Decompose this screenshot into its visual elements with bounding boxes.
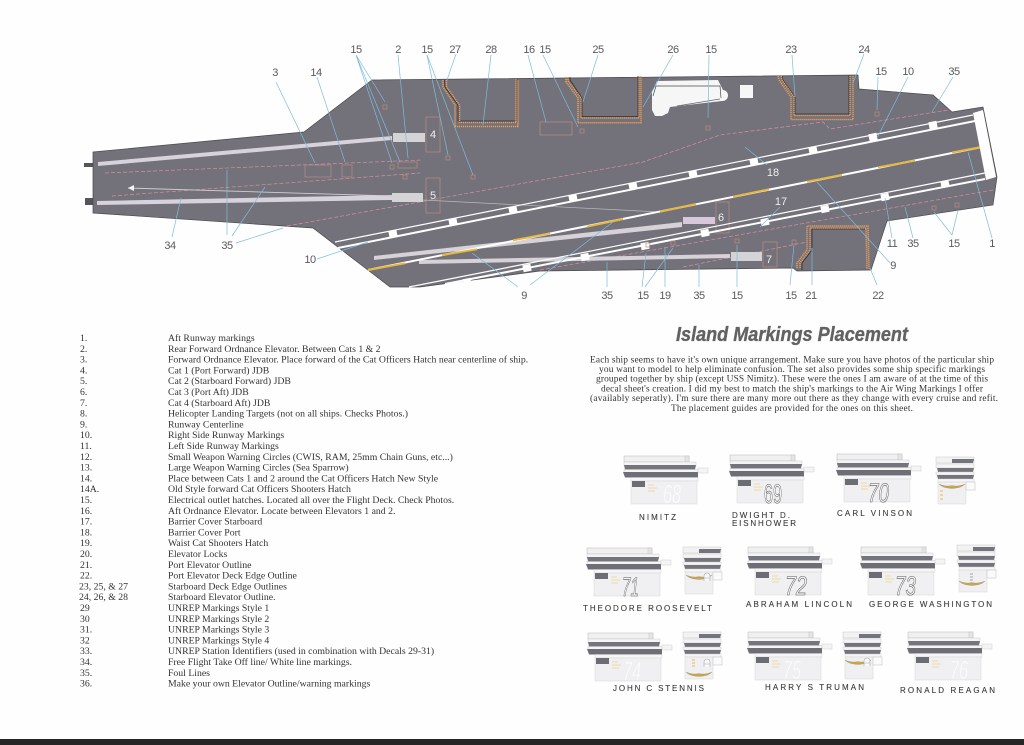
ship: Theodore Roosevelt: THEODORE ROOSEVELT	[583, 604, 712, 613]
ship: Harry S Truman: HARRY S TRUMAN	[765, 683, 864, 692]
elevator outline 27 and 28	[443, 79, 518, 126]
catapult 1 track and JDB 4	[98, 117, 440, 166]
numbered decal list: Forward Ordnance Elevator. Place forward of the Cat Officers Hatch near centerline of ship.	[168, 355, 528, 366]
ship: John C Stennis detail	[683, 632, 722, 679]
callout numbers: 10	[902, 66, 914, 78]
numbered decal list: 13.	[80, 463, 92, 474]
ship: George Washington	[860, 547, 992, 609]
numbered decal list: Cat 3 (Port Aft) JDB	[168, 387, 249, 398]
callout numbers: 17	[775, 196, 787, 208]
catapult 3 track and JDB 6: 6	[718, 212, 724, 224]
numbered decal list: 14.	[80, 473, 92, 484]
ship: Carl Vinson: CARL VINSON	[837, 509, 912, 518]
numbered decal list: Cat 4 (Starboard Aft) JDB	[168, 398, 271, 409]
numbered decal list: 33.	[80, 646, 92, 657]
numbered decal list: 10.	[80, 430, 92, 441]
numbered decal list: Helicopter Landing Targets (not on all ships. Checks Photos.)	[168, 409, 408, 420]
catapult 2 track and JDB 5: 5	[430, 190, 436, 202]
scanned bottom edge	[0, 739, 1024, 745]
numbered decal list: Small Weapon Warning Circles (CWIS, RAM, 25mm Chain Guns, etc...)	[168, 452, 453, 463]
numbered decal list: Place between Cats 1 and 2 around the Cat Officers Hatch New Style	[168, 473, 438, 484]
ship: Ronald Reagan	[900, 632, 995, 695]
ship: Ronald Reagan: RONALD REAGAN	[900, 686, 995, 695]
callout numbers: 2	[395, 44, 401, 56]
ship: Theodore Roosevelt	[583, 548, 712, 613]
ship: Harry S Truman detail	[843, 632, 882, 679]
ship: Theodore Roosevelt detail	[683, 547, 722, 594]
right side runway markings	[335, 115, 975, 248]
island	[652, 80, 728, 116]
island markings paragraph: decal sheet's creation. I did my best to match the ship's markings to the Air Wing Markings I offer	[601, 384, 984, 394]
callout numbers: 10	[304, 254, 316, 266]
numbered decal list: 35.	[80, 668, 92, 679]
callout numbers: 9	[521, 290, 527, 302]
carrier flight deck diagram	[84, 44, 997, 302]
ship: Dwight D. Eisenhower: 69	[764, 479, 782, 509]
numbered decal list: 20.	[80, 549, 92, 560]
numbered decal list: 22.	[80, 571, 92, 582]
ship: Ronald Reagan: 76	[950, 655, 968, 685]
ship: Dwight D. Eisenhower: EISNHOWER	[732, 519, 796, 528]
callout numbers: 35	[948, 66, 960, 78]
free flight arrow line	[128, 185, 660, 212]
numbered decal list: Starboard Deck Edge Outlines	[168, 581, 287, 592]
callout numbers: 11	[887, 238, 898, 250]
callout numbers	[164, 44, 995, 302]
numbered decal list: 12.	[80, 452, 92, 463]
ship: John C Stennis: 74	[623, 656, 641, 686]
island markings paragraph: The placement guides are provided for the ones on this sheet.	[671, 403, 913, 414]
catapult 3 track and JDB 6	[374, 202, 729, 260]
elevator outline 23 and 24	[778, 75, 853, 120]
numbered decal list: 2.	[80, 344, 87, 355]
ship: Nimitz: NIMITZ	[639, 513, 676, 522]
aft runway marking band	[973, 110, 996, 180]
ship: Harry S Truman: 75	[783, 655, 801, 685]
ship: Carl Vinson detail	[936, 457, 975, 504]
callout numbers: 9	[890, 260, 896, 272]
numbered decal list: Barrier Cover Starboard	[168, 517, 262, 528]
ship: Dwight D. Eisenhower: DWIGHT D.	[732, 511, 790, 520]
numbered decal list: UNREP Markings Style 1	[168, 603, 269, 614]
ship: Abraham Lincoln: 72	[785, 571, 807, 601]
callout numbers: 18	[767, 167, 779, 179]
callout numbers: 15	[875, 66, 887, 78]
numbered decal list: 16.	[80, 506, 92, 517]
ship: Dwight D. Eisenhower	[729, 455, 814, 528]
numbered decal list: 23, 25, & 27	[79, 581, 128, 592]
numbered decal list: 18.	[80, 527, 92, 538]
callout numbers: 24	[858, 44, 870, 56]
heading: Island Markings Placement: Island Markings Placement	[676, 324, 909, 346]
numbered decal list: Elevator Locks	[168, 549, 227, 560]
numbered decal list: Left Side Runway Markings	[168, 441, 279, 452]
catapult 4 track and JDB 7	[419, 242, 777, 267]
island deck square	[740, 85, 753, 98]
ship: George Washington: 73	[895, 571, 916, 601]
callout numbers: 15	[350, 44, 362, 56]
left side runway markings	[409, 173, 985, 287]
numbered decal list: UNREP Station Identifiers (used in combination with Decals 29-31)	[168, 646, 434, 657]
numbered decal list: Make your own Elevator Outline/warning markings	[168, 679, 370, 690]
ship: Theodore Roosevelt: 71	[622, 572, 639, 602]
numbered decal list: Starboard Elevator Outline.	[168, 592, 276, 603]
callout numbers: 25	[592, 44, 604, 56]
numbered decal list: 31.	[80, 625, 92, 636]
numbered decal list: Foul Lines	[168, 668, 210, 679]
numbered decal list: 8.	[80, 409, 87, 420]
island markings paragraph: you want to model to help eliminate confusion. The set also provides some ship specific markings	[599, 364, 985, 375]
numbered decal list: 6.	[80, 387, 87, 398]
ship: George Washington detail	[957, 545, 996, 592]
numbered decal list: Runway Centerline	[168, 419, 244, 430]
port elevator outline 21 and 22	[797, 226, 869, 270]
callout numbers: 35	[693, 290, 705, 302]
ship: John C Stennis	[587, 633, 704, 693]
callout numbers: 15	[421, 44, 433, 56]
numbered decal list: 4.	[80, 365, 87, 376]
catapult 2 track and JDB 5	[97, 178, 440, 213]
island markings paragraph	[590, 354, 998, 414]
numbered decal list: 1.	[80, 333, 87, 344]
callout numbers: 22	[872, 290, 884, 302]
callout numbers: 15	[637, 290, 649, 302]
island markings paragraph: (availably seperatly). I'm sure there are many more out there as they change with every cruise and refit.	[590, 393, 998, 404]
ship: Abraham Lincoln: ABRAHAM LINCOLN	[746, 600, 852, 609]
numbered decal list: 29	[80, 603, 90, 614]
numbered decal list: 15.	[80, 495, 92, 506]
numbered decal list: 9.	[80, 419, 87, 430]
numbered decal list: 7.	[80, 398, 87, 409]
callout numbers: 23	[785, 44, 797, 56]
numbered decal list	[79, 333, 528, 690]
catapult 4 track and JDB 7: 7	[766, 254, 772, 266]
numbered decal list: 32	[80, 635, 90, 646]
numbered decal list: Right Side Runway Markings	[168, 430, 284, 441]
numbered decal list: UNREP Markings Style 2	[168, 614, 269, 625]
numbered decal list: Old Style forward Cat Officers Shooters Hatch	[168, 484, 351, 495]
numbered decal list: Port Elevator Deck Edge Outline	[168, 571, 297, 582]
numbered decal list: Port Elevator Outline	[168, 560, 251, 571]
ship: Carl Vinson	[836, 454, 921, 518]
callout numbers: 15	[705, 44, 717, 56]
callout numbers: 34	[164, 240, 176, 252]
callout numbers: 19	[659, 290, 671, 302]
numbered decal list: Large Weapon Warning Circles (Sea Sparrow)	[168, 463, 349, 474]
numbered decal list: Aft Runway markings	[168, 333, 255, 344]
hatches and ordnance elevators	[305, 105, 959, 247]
numbered decal list: 14A.	[80, 484, 99, 495]
numbered decal list: 19.	[80, 538, 92, 549]
island markings paragraph: Each ship seems to have it's own unique arrangement. Make sure you have photos of the particular ship	[590, 354, 994, 366]
numbered decal list: Waist Cat Shooters Hatch	[168, 538, 268, 549]
callout numbers: 16	[523, 44, 535, 56]
callout numbers: 27	[449, 44, 461, 56]
numbered decal list: Rear Forward Ordnance Elevator. Between Cats 1 & 2	[168, 344, 381, 355]
numbered decal list: 3.	[80, 355, 87, 366]
numbered decal list: Cat 1 (Port Forward) JDB	[168, 365, 270, 376]
callout numbers: 14	[310, 67, 322, 79]
ship: Carl Vinson: 70	[868, 478, 889, 508]
foul lines	[105, 110, 993, 270]
callout numbers: 35	[907, 238, 919, 250]
numbered decal list: 30	[80, 614, 90, 625]
callout numbers: 3	[272, 67, 278, 79]
numbered decal list: 34.	[80, 657, 92, 668]
numbered decal list: UNREP Markings Style 3	[168, 625, 269, 636]
callout numbers: 15	[785, 290, 797, 302]
numbered decal list: 17.	[80, 517, 92, 528]
callout numbers: 28	[485, 44, 497, 56]
callout numbers: 26	[667, 44, 679, 56]
numbered decal list: Free Flight Take Off line/ White line markings.	[168, 657, 352, 668]
numbered decal list: Cat 2 (Starboard Forward) JDB	[168, 376, 291, 387]
callout numbers: 15	[731, 290, 743, 302]
catapult 1 track and JDB 4: 4	[430, 129, 436, 141]
numbered decal list: UNREP Markings Style 4	[168, 635, 269, 646]
numbered decal list: 36.	[80, 679, 92, 690]
ship: Nimitz	[623, 456, 708, 522]
elevator outline 25 and 26	[566, 76, 641, 123]
numbered decal list: 11.	[80, 441, 92, 452]
ship: Harry S Truman	[747, 632, 864, 692]
runway centerline	[368, 146, 987, 270]
callout numbers: 1	[989, 238, 995, 250]
callout numbers: 35	[221, 240, 233, 252]
numbered decal list: 5.	[80, 376, 87, 387]
numbered decal list: 21.	[80, 560, 92, 571]
hull outline	[84, 75, 997, 287]
ship: John C Stennis: JOHN C STENNIS	[613, 684, 704, 693]
callout numbers: 15	[948, 238, 960, 250]
callout numbers: 35	[601, 290, 613, 302]
leader lines	[172, 54, 992, 287]
ship: Nimitz: 68	[663, 479, 681, 509]
numbered decal list: 24, 26, & 28	[79, 592, 128, 603]
numbered decal list: Aft Ordnance Elevator. Locate between Elevators 1 and 2.	[168, 506, 395, 517]
island markings paragraph: grouped together by ship (except USS Nimitz). These were the ones I am aware of at the time of this	[596, 374, 988, 384]
callout numbers: 15	[539, 44, 551, 56]
numbered decal list: Electrical outlet hatches. Located all over the Flight Deck. Check Photos.	[168, 495, 454, 506]
numbered decal list: Barrier Cover Port	[168, 527, 241, 538]
ship: Abraham Lincoln	[746, 547, 852, 609]
callout numbers: 21	[805, 290, 817, 302]
ship: George Washington: GEORGE WASHINGTON	[869, 600, 992, 609]
